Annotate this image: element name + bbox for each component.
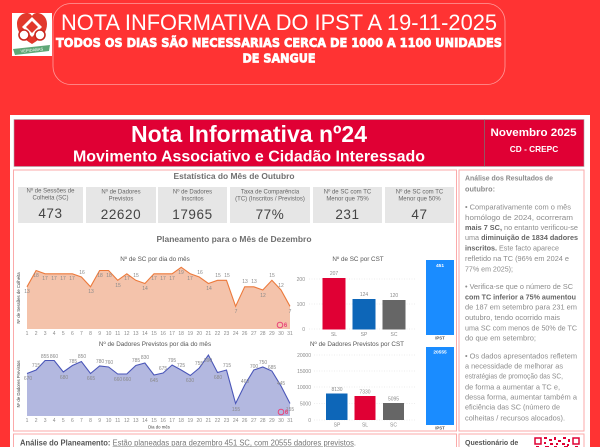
KPI: sessions under 50%: Nº de SC com TC [396, 188, 444, 196]
area chart: expected donors per day: 20 [197, 418, 202, 424]
area chart: expected donors per day: 29 [269, 418, 275, 424]
area chart: expected donors per day: 715 [32, 363, 40, 369]
area chart: sessions per day: 15 [133, 273, 139, 279]
area chart: expected donors per day: 15 [151, 418, 157, 424]
area chart: sessions per day: 22 [215, 331, 220, 337]
area chart: sessions per day: 16 [160, 331, 166, 337]
KPI: attendance rate: 77% [256, 207, 284, 222]
panel: questionnaire: Questionário de [465, 440, 518, 447]
area chart: sessions per day: 13 [133, 331, 139, 337]
analysis paragraph 2: outubro, tendo ocorrido mais [465, 314, 560, 322]
banner title: NOTA INFORMATIVA DO IPST A 19-11-2025 [61, 10, 497, 35]
area chart: sessions per day: 23 [224, 331, 229, 337]
analysis paragraph 3 [465, 352, 577, 422]
area chart: expected donors per day: 28 [260, 418, 266, 424]
panel: statistics and planning [14, 170, 456, 431]
area chart: expected donors per day: 680 [60, 375, 68, 381]
KPI bar: total expected donors IPST: 20555 [433, 350, 447, 356]
area chart: sessions per day: 6 [71, 331, 74, 337]
bar chart: expected donors per CST: SC [390, 422, 397, 428]
area chart: expected donors per day: 675 [159, 366, 167, 372]
bar chart: sessions per CST: SC [391, 332, 398, 338]
area chart: expected donors per day: Dia do mês [148, 424, 170, 430]
analysis paragraph 3: • Os dados apresentados refletem [465, 352, 577, 360]
KPI: expected donors [86, 187, 156, 223]
area chart: sessions per day: 21 [206, 331, 211, 337]
KPI: registered donors [158, 187, 227, 223]
area chart: sessions per day: Nº de SC por dia do mês [120, 256, 190, 263]
area chart: sessions per day: 19 [178, 270, 184, 276]
area chart: sessions per day: 1 [26, 331, 29, 337]
area chart: sessions per day: 15 [151, 331, 157, 337]
area chart: expected donors per day: 31 [287, 418, 293, 424]
area chart: sessions per day: 15 [215, 273, 221, 279]
area chart: expected donors per day: 155 [232, 407, 240, 413]
area chart: expected donors per day: 8 [89, 418, 92, 424]
area chart: sessions per day: 7 [289, 309, 292, 315]
marker: day 30 note: 6 [284, 323, 288, 329]
bar chart: sessions per CST: 0 [302, 327, 305, 333]
area chart: expected donors per day: 685 [268, 365, 276, 371]
area chart: expected donors per day: 2 [35, 418, 38, 424]
banner subtitle: DE SANGUE [242, 52, 316, 66]
area chart: expected donors per day: 665 [87, 376, 95, 382]
area chart: expected donors per day: 785 [69, 359, 77, 365]
analysis paragraph 3: estratégias de promoção das SC, [465, 372, 563, 380]
KPI: registered donors: Nº de Dadores [173, 188, 212, 196]
icon: IPST donors logo [12, 13, 52, 56]
area chart: sessions per day: 26 [242, 331, 248, 337]
area chart: sessions per day: 27 [251, 331, 257, 337]
area chart: expected donors per day: 12 [124, 418, 130, 424]
analysis paragraph 2: de 187 em setembro para 231 em [465, 304, 577, 312]
area chart: expected donors per day: 6 [71, 418, 74, 424]
bar chart: expected donors per CST: SL [362, 422, 368, 428]
bar chart: expected donors per CST: 20000 [297, 353, 311, 359]
area chart: sessions per day: 17 [187, 276, 193, 282]
bar chart: sessions per CST: SP [361, 332, 368, 338]
KPI: sessions: 473 [38, 206, 63, 221]
area chart: sessions per day: 31 [287, 331, 293, 337]
KPI bar: total expected donors IPST [426, 347, 454, 430]
bar chart: expected donors per CST: Nº de Dadores Previstos por CST [310, 341, 404, 348]
area chart: sessions per day: 18 [97, 273, 103, 279]
KPI bar: total expected donors IPST: IPST [435, 426, 445, 430]
area chart: expected donors per day: 22 [215, 418, 220, 424]
KPI bar: total sessions IPST: IPST [435, 336, 445, 340]
KPI: sessions under 75%: Menor que 75% [326, 196, 369, 202]
analysis paragraph 1: • Comparativamente com o mês [465, 204, 571, 212]
marker: day 30 note [278, 409, 289, 416]
KPI bar: total sessions IPST [426, 260, 454, 340]
area chart: expected donors per day: 14 [142, 418, 148, 424]
area chart: sessions per day: 19 [188, 331, 193, 337]
area chart: expected donors per day: 11 [115, 418, 121, 424]
area chart: expected donors per day: 5 [62, 418, 65, 424]
heading: October statistics: Estatística do Mês de Outubro [174, 172, 295, 181]
area chart: sessions per day: 5 [62, 331, 65, 337]
area chart: sessions per day: 13 [251, 279, 257, 285]
area chart: expected donors per day: 3 [44, 418, 47, 424]
icon: QR code [535, 437, 579, 447]
bar chart: sessions per CST: 200 [297, 277, 305, 283]
header: report title band [14, 120, 584, 166]
area chart: sessions per day [16, 256, 293, 337]
analysis paragraph 2 [465, 283, 577, 342]
KPI: attendance rate: (TC) (Inscritos / Previstos) [235, 196, 305, 202]
panel: analysis of October results: outubro: [465, 186, 495, 194]
area chart: expected donors per day: 855 [41, 354, 49, 360]
area chart: expected donors per day: 23 [224, 418, 229, 424]
KPI: attendance rate: Taxa de Comparência [241, 190, 300, 196]
analysis paragraph 1: uma diminuição de 1834 dadores [465, 234, 578, 242]
area chart: expected donors per day: 700 [250, 364, 258, 370]
area chart: sessions per day: 3 [44, 331, 47, 337]
area chart: sessions per day: 7 [235, 309, 238, 315]
area chart: sessions per day: 18 [33, 273, 39, 279]
area chart: sessions per day: 12 [124, 331, 130, 337]
report title: Nota Informativa nº24 [131, 121, 367, 147]
area chart: sessions per day: 4 [53, 331, 56, 337]
report subtitle: Movimento Associativo e Cidadão Interessado [73, 148, 425, 166]
analysis paragraph 1: inscritos. Este facto aparece [465, 244, 559, 252]
area chart: sessions per day: 11 [115, 331, 121, 337]
report date: Novembro 2025 [490, 127, 576, 139]
report department: CD - CREPC [510, 144, 558, 154]
area chart: expected donors per day: 1 [26, 418, 29, 424]
area chart: expected donors per day: 155 [286, 407, 294, 413]
area chart: sessions per day: 13 [88, 289, 94, 295]
KPI: attendance rate [230, 187, 310, 223]
area chart: expected donors per day: 13 [133, 418, 139, 424]
area chart: expected donors per day: 860 [50, 354, 58, 360]
KPI: sessions [18, 187, 83, 223]
bar chart: sessions per CST: 207 [330, 271, 338, 277]
area chart: sessions per day: 7 [80, 331, 83, 337]
marker: day 30 note [277, 322, 288, 329]
area chart: sessions per day: 12 [278, 283, 284, 289]
analysis paragraph 2: com TC inferior a 75% aumentou [465, 294, 576, 302]
area chart: sessions per day: 2 [35, 331, 38, 337]
bar chart: sessions per CST: 100 [297, 302, 305, 308]
area chart: sessions per day: Nº de Sessões de Colheita [16, 272, 21, 324]
area chart: sessions per day: 17 [169, 276, 175, 282]
area chart: expected donors per day: 725 [177, 363, 185, 369]
icon: IPST donors logo: VEPIDABAS [20, 46, 44, 54]
area chart: expected donors per day: 850 [78, 354, 86, 360]
area chart: sessions per day: 12 [260, 293, 266, 299]
bar chart: expected donors per CST: 5000 [300, 402, 311, 408]
area chart: sessions per day: 29 [269, 331, 275, 337]
area chart: expected donors per day: 645 [150, 378, 158, 384]
analysis paragraph 1: 77% em 2025); [465, 266, 513, 274]
area chart: expected donors per day: 18 [178, 418, 184, 424]
area chart: expected donors per day: 24 [233, 418, 239, 424]
marker: day 30 note: 6 [285, 410, 289, 416]
area chart: expected donors per day: 4 [53, 418, 56, 424]
bar chart: sessions per CST [297, 256, 415, 338]
bar chart: expected donors per CST: 5095 [388, 396, 399, 402]
area chart: expected donors per day: 830 [141, 355, 149, 361]
bar chart: expected donors per CST: 10000 [297, 385, 311, 391]
area chart: sessions per day: 15 [269, 273, 275, 279]
banner subtitle: TODOS OS DIAS SÃO NECESSARIAS CERCA DE 1000 A 1100 UNIDADES [56, 35, 502, 50]
analysis paragraph 1: mais 7 SC, no entanto verificou-se [465, 224, 578, 232]
area chart: expected donors per day: 660 [123, 377, 131, 383]
area chart: expected donors per day: 19 [188, 418, 193, 424]
area chart: sessions per day: 15 [115, 283, 121, 289]
banner subtitle [56, 35, 502, 66]
area chart: expected donors per day: 16 [160, 418, 166, 424]
KPI: sessions under 75% [313, 187, 382, 223]
area chart: expected donors per day [16, 341, 294, 430]
analysis paragraph 3: dessa forma, aumentar também a [465, 394, 577, 402]
bar chart: sessions per CST: 120 [390, 293, 398, 299]
area chart: expected donors per day: 755 [195, 361, 203, 367]
area chart: sessions per day: 15 [224, 273, 230, 279]
area chart: sessions per day: 16 [197, 270, 203, 276]
analysis paragraph 3: a necessidade de melhorar as [465, 362, 563, 370]
area chart: sessions per day: 17 [69, 276, 75, 282]
analysis paragraph 2: uma SC com menos de 50% de TC [465, 324, 577, 332]
heading: December planning: Planeamento para o Mês de Dezembro [156, 235, 312, 244]
KPI: expected donors: 22620 [101, 207, 141, 222]
area chart: sessions per day: 8 [89, 331, 92, 337]
area chart: expected donors per day: Nº de Dadores Previstos por dia do mês [99, 341, 211, 348]
analysis paragraph 3: eficiência das SC (número de [465, 404, 560, 412]
bar chart: expected donors per CST: 7330 [359, 390, 371, 396]
analysis paragraph 3: colheitas / recursos alocados). [465, 414, 565, 422]
bar chart: expected donors per CST: 8130 [331, 387, 343, 393]
area chart: sessions per day: 24 [233, 331, 239, 337]
KPI: registered donors: Inscritos [181, 196, 204, 202]
KPI: expected donors: Nº de Dadores [101, 188, 141, 196]
KPI: sessions under 75%: 231 [335, 207, 360, 222]
area chart: expected donors per day: 10 [106, 418, 112, 424]
area chart: expected donors per day: 795 [168, 358, 176, 364]
KPI: sessions under 50%: 47 [411, 207, 428, 222]
area chart: sessions per day: 28 [260, 331, 266, 337]
area chart: expected donors per day: 630 [186, 378, 194, 384]
bar chart: sessions per CST: Nº de SC por CST [332, 256, 384, 263]
area chart: expected donors per day: 760 [105, 360, 113, 366]
bar chart: expected donors per CST: 0 [308, 418, 311, 424]
area chart: sessions per day: 13 [242, 279, 248, 285]
area chart: expected donors per day: 750 [259, 360, 267, 366]
panel: questionnaire [459, 434, 584, 447]
area chart: sessions per day: 9 [98, 331, 101, 337]
area chart: sessions per day: 17 [51, 276, 57, 282]
area chart: sessions per day: 14 [206, 286, 212, 292]
banner title box [53, 4, 505, 84]
area chart: expected donors per day: 890 [204, 358, 212, 364]
area chart: expected donors per day: Nº de Dadores Previstos [16, 361, 21, 407]
KPI: sessions: Nº de Sessões de [27, 188, 75, 194]
area chart: sessions per day: 18 [178, 331, 184, 337]
area chart: expected donors per day: 9 [98, 418, 101, 424]
bar chart: expected donors per CST [297, 341, 415, 428]
bar chart: sessions per CST: 124 [360, 292, 368, 298]
panel: analysis of October results [459, 170, 584, 431]
area chart: sessions per day: 17 [160, 276, 166, 282]
analysis paragraph 1 [465, 204, 578, 274]
area chart: sessions per day: 17 [124, 276, 130, 282]
area chart: sessions per day: 30 [278, 331, 284, 337]
area chart: sessions per day: 17 [169, 331, 175, 337]
area chart: sessions per day: 17 [151, 276, 157, 282]
area chart: expected donors per day: 27 [251, 418, 257, 424]
area chart: expected donors per day: 17 [169, 418, 175, 424]
area chart: sessions per day: 10 [106, 331, 112, 337]
area chart: expected donors per day: 670 [24, 376, 32, 382]
area chart: expected donors per day: 26 [242, 418, 248, 424]
area chart: expected donors per day: 460 [241, 379, 249, 385]
panel: report sheet [10, 115, 590, 447]
bar chart: sessions per CST: SL [331, 332, 337, 338]
panel: planning analysis [14, 434, 456, 447]
area chart: sessions per day: 20 [197, 331, 202, 337]
KPI: sessions under 50% [385, 187, 454, 223]
area chart: expected donors per day: 660 [114, 377, 122, 383]
area chart: expected donors per day: 780 [96, 359, 104, 365]
area chart: sessions per day: 16 [79, 270, 85, 276]
area chart: sessions per day: 18 [106, 273, 112, 279]
KPI: expected donors: Previstos [109, 196, 133, 202]
area chart: expected donors per day: 7 [80, 418, 83, 424]
area chart: expected donors per day: 30 [278, 418, 284, 424]
analysis paragraph 3: de forma a aumentar a TC e, [465, 384, 560, 392]
analysis paragraph 1: homólogo de 2024, ocorreram [465, 214, 573, 222]
analysis paragraph 2: • Verifica-se que o número de SC [465, 283, 573, 291]
area chart: expected donors per day: 21 [206, 418, 211, 424]
area chart: sessions per day: 17 [60, 276, 66, 282]
analysis paragraph 2: do que em setembro; [465, 334, 536, 342]
area chart: expected donors per day: 785 [132, 358, 140, 364]
KPI: registered donors: 17965 [172, 207, 213, 222]
KPI: sessions: Colheita (SC) [32, 196, 69, 202]
KPI: sessions under 75%: Nº de SC com TC [324, 188, 372, 196]
area chart: sessions per day: 14 [142, 331, 148, 337]
area chart: sessions per day: 14 [142, 286, 148, 292]
panel: analysis of October results: Análise dos Resultados de [465, 174, 553, 182]
area chart: sessions per day: 13 [24, 289, 30, 295]
KPI: sessions under 50%: Menor que 50% [398, 196, 441, 202]
KPI bar: total sessions IPST: 451 [436, 263, 444, 269]
area chart: sessions per day: 17 [42, 276, 48, 282]
bar chart: expected donors per CST: 15000 [297, 369, 311, 375]
area chart: expected donors per day: 680 [214, 375, 222, 381]
bar chart: expected donors per CST: SP [334, 422, 341, 428]
analysis paragraph 1: refletido na TC (96% em 2024 e [465, 255, 569, 263]
area chart: expected donors per day: 445 [277, 381, 285, 387]
area chart: expected donors per day: 715 [223, 363, 231, 369]
